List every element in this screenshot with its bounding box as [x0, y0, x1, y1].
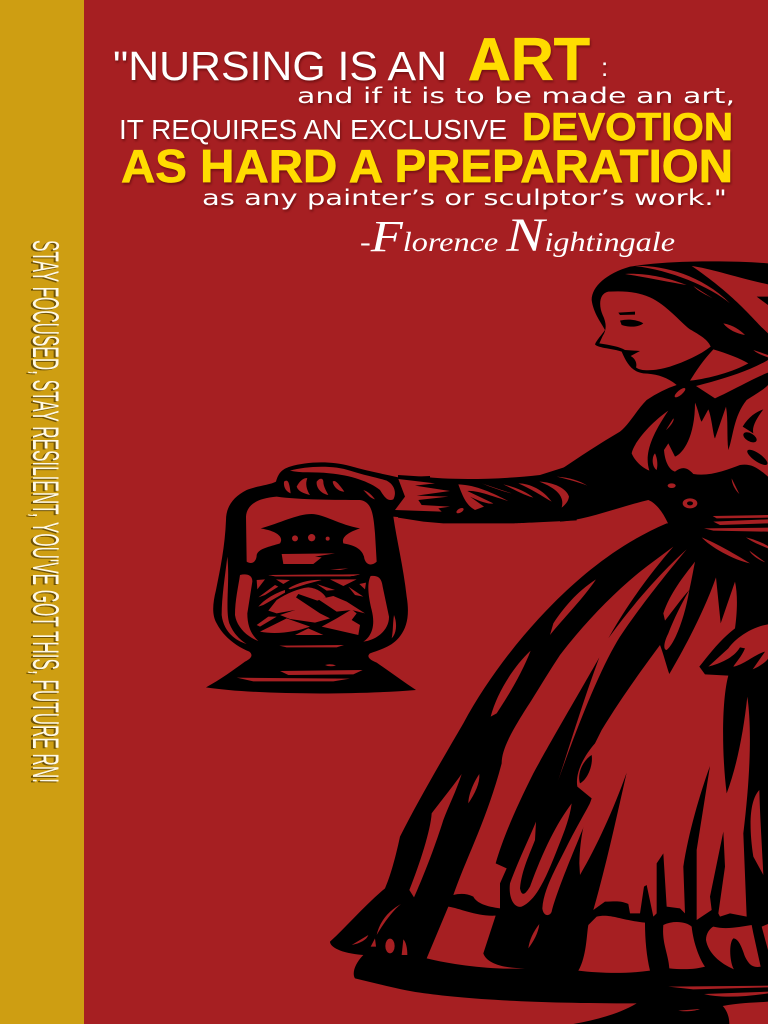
floor stripes [668, 986, 768, 989]
skirt [330, 520, 768, 1024]
bodice folds [742, 430, 758, 444]
arm [398, 463, 577, 523]
burner vents [292, 535, 298, 541]
glass sides [235, 574, 258, 641]
quote heading: IT REQUIRES AN EXCLUSIVE [119, 114, 507, 145]
quote heading: as any painter’s or sculptor’s work." [202, 186, 727, 210]
black fold oval [579, 755, 592, 783]
quote heading: DEVOTION [522, 106, 733, 149]
hand on skirt [708, 624, 768, 669]
neck [690, 349, 748, 381]
eye and brow [618, 312, 635, 315]
belt stripes [713, 515, 768, 518]
sleeve cuff and arm folds [395, 477, 587, 514]
hem panels [427, 907, 525, 969]
quote heading: "NURSING IS AN [113, 43, 447, 89]
waist pleats [702, 537, 750, 563]
quote heading: AS HARD A PREPARATION [121, 140, 733, 192]
icon: lantern [206, 462, 430, 693]
figure: nurse silhouette [206, 261, 768, 1024]
main skirt panel [577, 577, 750, 920]
collar [696, 360, 768, 398]
pleat streaks [550, 579, 596, 635]
hair and veil streaks [635, 266, 730, 303]
quote heading: ART [468, 26, 590, 93]
quote heading [113, 26, 735, 210]
inner pleat shapes [510, 803, 572, 907]
panel: gold sidebar [0, 0, 84, 1024]
bodice [664, 385, 768, 477]
quote heading: and if it is to be made an art, [297, 84, 735, 108]
quote heading: : [601, 52, 608, 82]
lantern wire mesh [257, 574, 366, 635]
hand gripping handle [290, 467, 395, 500]
lantern upper window [246, 497, 377, 564]
signature: Florence Nightingale: -Florence Nightingale [360, 209, 675, 262]
buttons [668, 483, 676, 488]
upper body and head [560, 261, 768, 537]
lantern base slits [279, 645, 344, 647]
shoe details [377, 904, 401, 935]
face [599, 291, 711, 370]
